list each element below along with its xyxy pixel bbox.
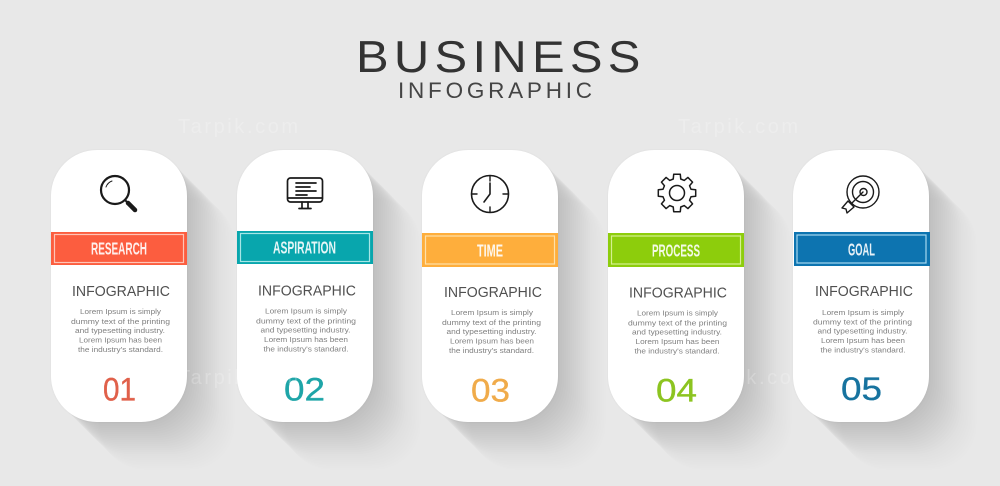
body text: dummy text of the printing	[442, 318, 541, 327]
title	[356, 32, 646, 103]
label band: time: TIME	[477, 240, 503, 260]
body text: the industry's standard.	[634, 346, 720, 356]
body text: Lorem Ipsum is simply	[80, 307, 161, 316]
icon: monitor	[288, 178, 322, 208]
number 05: 05	[841, 371, 882, 407]
panel: goal	[793, 150, 929, 422]
panel: research	[51, 150, 187, 422]
body text: Lorem Ipsum is simply	[637, 308, 718, 318]
body text	[256, 306, 356, 354]
body text: and typesetting industry.	[75, 326, 165, 335]
label band: goal: GOAL	[848, 240, 875, 260]
number 03: 03	[471, 372, 510, 408]
label band: process	[608, 233, 744, 267]
body text: dummy text of the printing	[628, 318, 727, 328]
body text: Lorem Ipsum is simply	[265, 306, 347, 316]
heading: infographic: INFOGRAPHIC	[444, 284, 542, 301]
label band: time	[422, 233, 558, 267]
body text: the industry's standard.	[820, 346, 906, 354]
icon: gear	[658, 174, 696, 212]
body text	[813, 308, 912, 354]
body text: the industry's standard.	[78, 345, 163, 354]
panel: time	[422, 150, 558, 422]
body text: Lorem Ipsum has been	[264, 335, 348, 344]
number 04: 04	[656, 372, 697, 408]
watermark: Tarpik.com	[178, 367, 301, 389]
number 02: 02	[284, 372, 325, 408]
icon: clock	[472, 176, 508, 212]
panel: process	[608, 150, 744, 422]
heading: infographic: INFOGRAPHIC	[258, 282, 356, 300]
body text: Lorem Ipsum has been	[636, 337, 720, 346]
watermark: Tarpik.com	[690, 367, 813, 389]
body text: Lorem Ipsum is simply	[822, 308, 904, 317]
heading: infographic: INFOGRAPHIC	[629, 284, 727, 302]
label band: process: PROCESS	[652, 240, 700, 260]
watermark: Tarpik.com	[178, 116, 301, 138]
label band: aspiration	[237, 231, 373, 264]
body text: Lorem Ipsum has been	[821, 336, 905, 345]
body text	[71, 307, 170, 354]
heading: business: BUSINESS	[356, 32, 646, 82]
label band: research	[51, 232, 187, 265]
heading: infographic: INFOGRAPHIC	[72, 283, 170, 300]
body text: and typesetting industry.	[818, 326, 908, 336]
icon: magnifier	[101, 176, 135, 210]
body text	[442, 308, 541, 355]
heading: infographic: INFOGRAPHIC	[815, 283, 913, 300]
label band: aspiration: ASPIRATION	[273, 238, 336, 258]
body text: dummy text of the printing	[71, 317, 170, 326]
label band: goal	[794, 232, 930, 266]
body text: Lorem Ipsum is simply	[451, 308, 533, 317]
body text: the industry's standard.	[449, 346, 534, 355]
body text: dummy text of the printing	[256, 316, 356, 326]
body text: the industry's standard.	[264, 344, 348, 354]
watermark: Tarpik.com	[678, 116, 801, 138]
body text: and typesetting industry.	[446, 327, 536, 336]
number 01: 01	[103, 372, 136, 408]
panel: aspiration	[237, 150, 373, 422]
subheading: infographic: INFOGRAPHIC	[398, 78, 592, 103]
body text: and typesetting industry.	[260, 326, 350, 334]
body text: and typesetting industry.	[632, 328, 722, 336]
label band: research: RESEARCH	[91, 238, 147, 258]
icon: target	[842, 176, 879, 213]
body text: Lorem Ipsum has been	[450, 336, 534, 346]
body text: dummy text of the printing	[813, 318, 912, 326]
body text	[628, 308, 727, 356]
body text: Lorem Ipsum has been	[79, 336, 162, 344]
